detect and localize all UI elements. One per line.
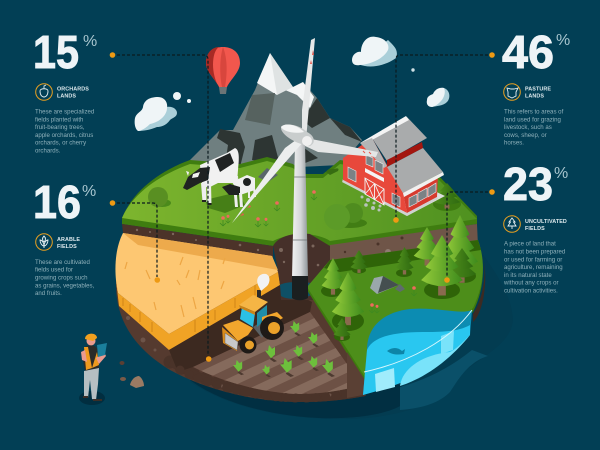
stat: uncultivated: agriculture, remaining bbox=[504, 264, 563, 271]
stat: pasture: land used for grazing bbox=[504, 116, 561, 124]
large cow bbox=[183, 148, 245, 213]
stat: orchards: fruit-bearing trees, bbox=[35, 124, 85, 131]
tractor bbox=[222, 274, 284, 354]
hot air balloon bbox=[206, 47, 240, 94]
leader 15 bbox=[110, 52, 212, 362]
ground shadow bbox=[190, 248, 513, 419]
soil wall right bbox=[330, 224, 478, 268]
mountain bbox=[187, 53, 362, 170]
stat: pasture: cows, sheep, or bbox=[504, 132, 547, 139]
stat: arable: 16 bbox=[33, 176, 81, 228]
stat: arable: These are cultivated bbox=[35, 259, 90, 266]
stat: orchards: LANDS bbox=[57, 94, 76, 100]
pasture grass bbox=[122, 157, 477, 246]
wind turbine bbox=[232, 38, 378, 300]
stat: orchards: % bbox=[83, 33, 97, 50]
farm tree bbox=[433, 183, 461, 211]
stat: pasture bbox=[502, 26, 570, 146]
stat: arable: ARABLE bbox=[57, 237, 80, 243]
stat: arable: fields used for bbox=[35, 266, 73, 274]
rocks bbox=[258, 168, 405, 294]
stat: orchards: These are specialized bbox=[35, 108, 94, 116]
stat: orchards: ORCHARDS bbox=[57, 86, 89, 92]
stat: uncultivated: has not been prepared bbox=[504, 248, 565, 256]
stat: pasture: 46 bbox=[502, 26, 554, 78]
stones near worker bbox=[120, 361, 144, 388]
stat: uncultivated: without any crops or bbox=[503, 280, 559, 286]
cloud top right bbox=[352, 37, 415, 72]
bushes bbox=[148, 168, 367, 230]
stat: orchards: 15 bbox=[33, 26, 79, 78]
stat: arable: growing crops such bbox=[35, 274, 88, 282]
stat: arable: % bbox=[82, 183, 96, 200]
leader 16 bbox=[110, 200, 160, 283]
stat: uncultivated: cultivation activities. bbox=[504, 288, 558, 294]
brown corner under grass bbox=[347, 352, 365, 398]
worker bbox=[79, 334, 107, 405]
stat: arable: as grains, vegetables, bbox=[35, 282, 95, 290]
pond reflection bbox=[400, 350, 488, 410]
stat: uncultivated bbox=[503, 158, 568, 294]
stat: uncultivated: or used for farming or bbox=[504, 256, 562, 264]
stat: arable: and fruits. bbox=[35, 290, 62, 297]
furrow trench bbox=[169, 285, 312, 372]
barn bbox=[342, 116, 445, 216]
leader 23 bbox=[444, 189, 495, 283]
stat: pasture: PASTURE bbox=[525, 86, 551, 92]
arable field sand bbox=[115, 233, 280, 350]
stat: pasture: % bbox=[556, 32, 570, 49]
stat: uncultivated: in its natural state bbox=[504, 272, 552, 279]
crop sprouts bbox=[233, 321, 335, 377]
flowers bbox=[220, 190, 417, 313]
forest trees bbox=[322, 215, 478, 340]
stat: uncultivated: FIELDS bbox=[525, 226, 545, 232]
farm island soil base bbox=[116, 240, 368, 402]
stat: pasture: livestock, such as bbox=[504, 124, 552, 131]
stat: orchards bbox=[33, 26, 97, 154]
stat: orchards: apple orchards, citrus bbox=[35, 132, 93, 139]
leader 46 bbox=[393, 52, 495, 223]
uncultivated grass bbox=[307, 240, 485, 382]
stat: arable: FIELDS bbox=[57, 244, 77, 250]
tree shadows bbox=[321, 266, 476, 341]
stat: uncultivated: 23 bbox=[503, 158, 553, 210]
soil under pasture bbox=[122, 224, 273, 258]
calf bbox=[222, 175, 256, 207]
cloud left bbox=[135, 92, 191, 131]
stat: orchards: orchards, or cherry bbox=[35, 140, 87, 146]
stat: pasture: horses. bbox=[504, 140, 524, 146]
stat: pasture: This refers to areas of bbox=[504, 108, 564, 116]
pond bbox=[363, 309, 472, 395]
pit around tower bbox=[273, 234, 333, 300]
furrow field bbox=[176, 312, 347, 402]
cloud small right bbox=[427, 88, 449, 107]
stat: arable bbox=[33, 176, 96, 297]
stat: uncultivated: A piece of land that bbox=[504, 240, 556, 248]
stat: orchards: orchards. bbox=[35, 148, 61, 154]
stat: uncultivated: % bbox=[554, 165, 568, 182]
stat: uncultivated: UNCULTIVATED bbox=[525, 219, 567, 225]
stat: orchards: fields planted with bbox=[35, 116, 83, 124]
stat: pasture: LANDS bbox=[525, 94, 544, 100]
